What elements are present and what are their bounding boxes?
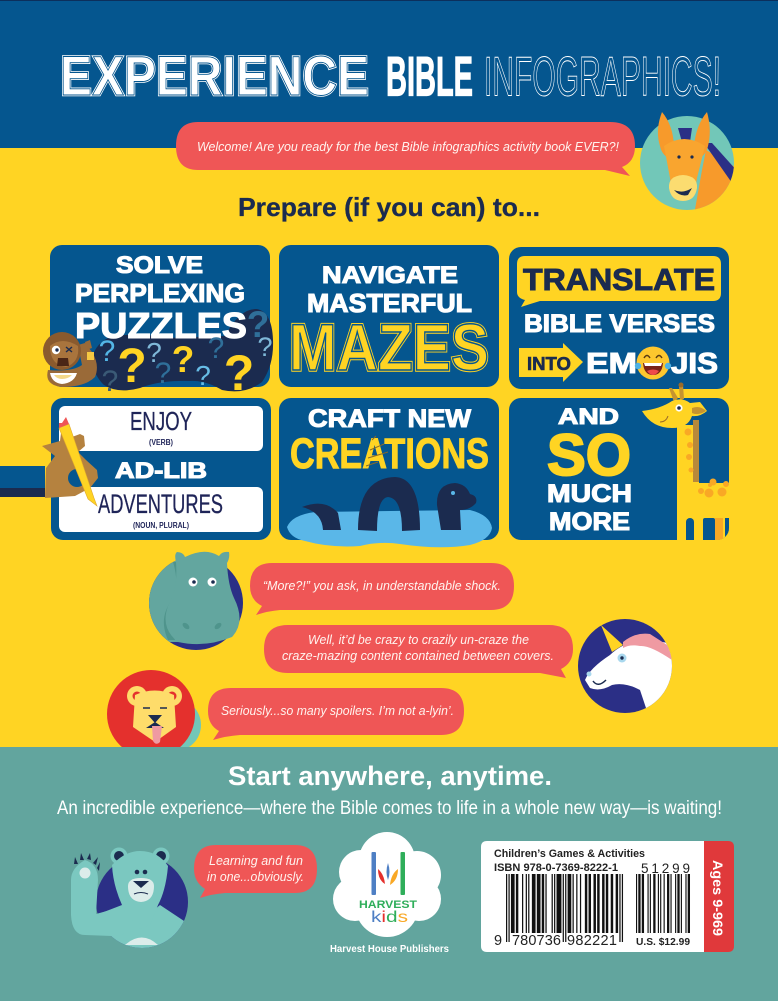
panel: translate bible verses into emojis: JIS [671,348,718,380]
yellow translate banner [517,256,721,307]
speech bubble: welcome [176,122,635,176]
mazes lettering: MAZES [289,310,489,384]
panel: craft new creations: CRAFT NEW [308,405,471,433]
speech bubble: welcome: Welcome! Are you ready for the best Bible infographics activity book EVER?! [197,139,619,154]
question marks: ? [117,340,147,393]
water [287,510,492,547]
barcode label: Children’s Games & Activities [494,848,645,860]
panel: navigate masterful mazes: NAVIGATE [322,262,458,289]
logo: harvest kids: HARVEST [359,899,417,911]
panel: and so much more [509,382,729,544]
panel: and so much more: MORE [549,508,630,536]
panel: navigate masterful mazes: MASTERFUL [307,288,472,318]
white cloud [333,832,441,937]
panel: solve perplexing puzzles [43,245,273,401]
panel: translate bible verses into emojis: EM [586,348,637,380]
speech bubble: more: “More?!” you ask, in understandable shock. [263,578,501,593]
speech bubble: spoilers: Seriously...so many spoilers. I’m not a-lyin’. [221,703,454,718]
icon: giraffe [642,382,729,544]
panel: navigate masterful mazes [279,245,499,387]
form field: enjoy [59,406,263,451]
icon: donkey [640,112,734,210]
barcode label: U.S. $12.99 [636,936,690,948]
barcode bars [506,904,623,942]
publisher name: Harvest House Publishers [330,943,449,955]
panel: translate bible verses into emojis [509,247,729,389]
question marks: ? [155,357,171,390]
question marks: ? [195,360,211,391]
panel: and so much more: SO [547,423,631,488]
barcode label: 51299 [641,861,690,876]
arrow: into [519,343,583,382]
question marks: ? [257,332,273,362]
barcode label: 780736 [512,933,561,949]
icon: puzzled child [43,332,97,387]
question marks: ? [247,304,269,345]
yellow translate banner: TRANSLATE [523,262,715,297]
speech bubble: crazy: Well, it’d be crazy to crazily un-craze the [308,632,529,647]
heading: prepare: Prepare (if you can) to... [238,192,540,222]
icon: waving bear [71,848,190,950]
panel: craft new creations [279,398,499,547]
panel: translate bible verses into emojis: BIBLE VERSES [524,310,715,338]
question marks: ? [224,345,254,401]
barcode label: 982221 [567,933,617,949]
form field: enjoy: (VERB) [149,438,173,447]
form field: adventures: ADVENTURES [98,489,223,519]
speech bubble: learning and fun [194,845,317,898]
logo: harvest kids [333,832,441,937]
speech bubble: spoilers [208,688,464,740]
icon: laughing emoji [635,346,671,380]
title: EXPERIENCE [60,44,369,107]
panel: solve perplexing puzzles: PUZZLES [75,305,247,346]
speech bubble: learning and fun: Learning and fun [209,853,303,868]
question-mark blob [93,309,273,391]
speech bubble: more [250,563,514,615]
panel: ad-lib adventures: AD-LIB [115,458,207,483]
panel: solve perplexing puzzles: SOLVE [116,252,203,279]
age tab [704,841,734,952]
panel: and so much more: AND [558,404,619,429]
form field: enjoy: ENJOY [130,406,192,436]
form field: adventures: (NOUN, PLURAL) [133,521,189,530]
panel: solve perplexing puzzles: PERPLEXING [75,278,245,308]
arrow: into: INTO [527,354,571,374]
form field: adventures [59,487,263,532]
question marks: ? [99,335,115,368]
mazes lettering: MAZES [289,310,489,384]
speech bubble: crazy [264,625,573,678]
logo: harvest kids: kids [371,909,408,926]
question marks [99,304,273,401]
question marks: ? [146,337,162,368]
icon: unicorn [578,619,672,713]
section heading: start anywhere: Start anywhere, anytime. [228,761,552,791]
barcode label: 9 [494,933,502,949]
panel: and so much more: MUCH [547,480,632,508]
speech bubble: crazy: craze-mazing content contained between covers. [282,648,554,663]
title [60,44,721,108]
panel: craft new creations: CREATIONS [290,430,489,478]
lake monster [302,477,476,531]
tagline: An incredible experience—where the Bible comes to life in a whole new way—is waiting! [57,798,722,819]
speech bubble: learning and fun: in one...obviously. [207,869,304,884]
icon: hippo [149,552,243,650]
age tab: Ages 9-969 [710,860,725,936]
panel: ad-lib adventures [51,398,271,540]
icon: lion [107,670,201,747]
question marks: ? [208,332,224,365]
title: EXPERIENCE [60,44,369,107]
question marks: ? [102,365,118,398]
title: BIBLE [386,44,473,108]
barcode label: ISBN 978-0-7369-8222-1 [494,862,618,874]
icon: hand with pencil [0,417,98,506]
question marks: ? [172,339,194,380]
barcode label [481,841,704,952]
